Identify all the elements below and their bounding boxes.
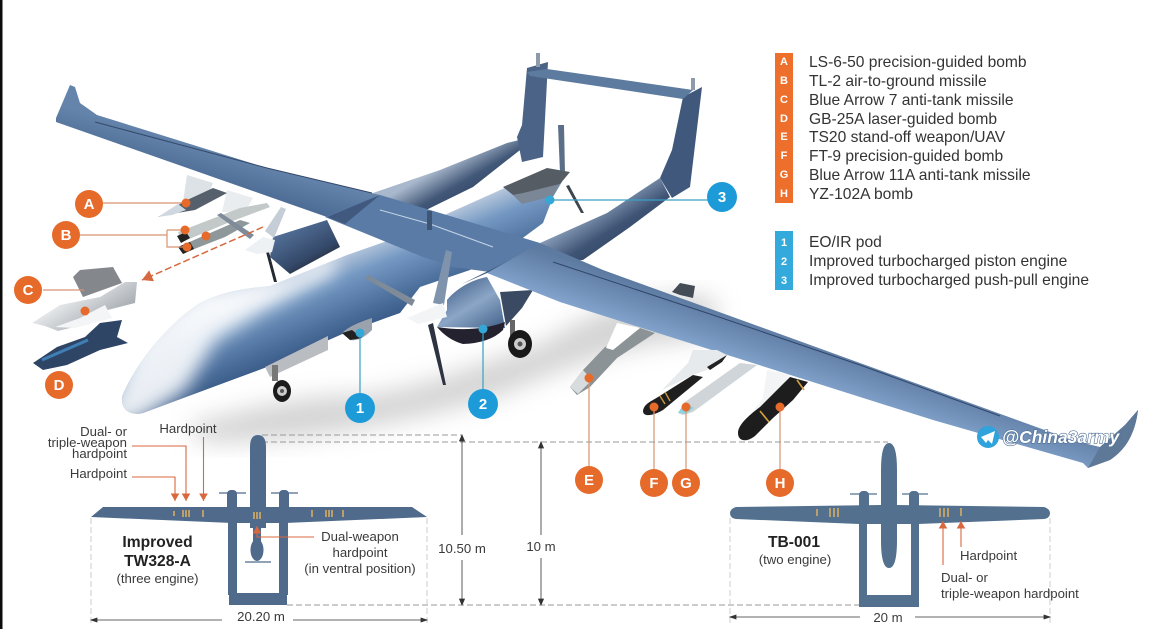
labels: TB-001: Hardpoint (960, 548, 1018, 563)
label E (575, 466, 603, 494)
winglet shade (1088, 410, 1138, 468)
E weapon (570, 323, 655, 395)
rear propeller (558, 125, 584, 213)
label B: B (61, 227, 72, 244)
weapons legend: YZ-102A bomb (809, 186, 913, 203)
label 1: 1 (356, 400, 364, 417)
labels: Improved TW328-A: triple-weapon (48, 435, 127, 450)
near engine nacelle (437, 277, 533, 344)
dimension guide lines (91, 435, 1050, 625)
horizontal tail (527, 69, 693, 99)
labels: TB-001 (759, 534, 1079, 625)
right wing (487, 243, 1138, 468)
labels: Improved TW328-A: Hardpoint (159, 421, 217, 436)
B missiles (178, 203, 270, 242)
A bomb (158, 188, 227, 217)
propellers (219, 493, 298, 562)
labels: Improved TW328-A: Hardpoint (70, 466, 127, 481)
equipment legend: Improved turbocharged push-pull engine (809, 272, 1089, 289)
fin tips (536, 53, 695, 90)
label H: H (775, 475, 785, 492)
label A: A (84, 196, 95, 213)
weapons legend: Blue Arrow 7 anti-tank missile (809, 92, 1014, 109)
plan view: TB-001 (730, 443, 1050, 607)
weapons legend: GB-25A laser-guided bomb (809, 111, 997, 128)
labels: Improved TW328-A: hardpoint (332, 545, 388, 560)
labels: Improved TW328-A: (in ventral position) (304, 561, 416, 576)
label H (766, 469, 794, 497)
H weapon (738, 370, 808, 440)
airframe (91, 435, 427, 605)
weapons legend: TL-2 air-to-ground missile (809, 73, 987, 90)
pylons (183, 175, 213, 202)
main aircraft illustration (32, 53, 1138, 468)
weapons legend: LS-6-50 precision-guided bomb (809, 54, 1027, 71)
watermark: @China3army (1002, 427, 1121, 447)
centre wing (325, 195, 540, 273)
label C: C (23, 282, 34, 299)
weapons legend: Blue Arrow 11A anti-tank missile (809, 167, 1031, 184)
small hardpoint behind wing (672, 283, 695, 298)
label E: E (584, 472, 594, 489)
near tail boom (540, 178, 670, 262)
label B (52, 221, 80, 249)
weapons legend: F (781, 150, 788, 162)
left wing weapons (158, 175, 270, 254)
ground shadow (189, 295, 718, 443)
label 3: 3 (718, 189, 726, 206)
labels: TB-001: (two engine) (759, 552, 831, 567)
left wing (56, 85, 380, 217)
weapons legend (775, 53, 1031, 203)
nose highlight (122, 258, 344, 414)
label F: F (649, 475, 659, 492)
weapon D (33, 320, 128, 370)
label 3 (707, 182, 737, 212)
weapons legend: A (780, 56, 788, 68)
labels: Improved TW328-A: Dual- or (80, 424, 128, 439)
main gear (508, 320, 532, 358)
labels: TB-001: 20 m (873, 610, 903, 625)
labels: Improved TW328-A: TW328-A (124, 553, 191, 570)
engine fairing (450, 245, 540, 290)
labels: TB-001: TB-001 (768, 534, 820, 551)
far tail boom (373, 137, 532, 213)
plan view: Improved TW328-A (91, 435, 427, 605)
equipment legend (775, 231, 1089, 290)
wing panel lines (553, 262, 1000, 416)
fuselage (122, 182, 562, 414)
hardpoint leader arrows (132, 437, 961, 565)
label G: G (680, 475, 692, 492)
label F (640, 469, 668, 497)
labels: Improved TW328-A: (three engine) (116, 571, 199, 586)
labels: Improved TW328-A: hardpoint (72, 446, 127, 461)
labels: Improved TW328-A: Improved (122, 534, 193, 551)
label 1 (345, 393, 375, 423)
screenshot edge (0, 0, 2, 629)
weapons legend: E (780, 131, 788, 143)
label G (672, 469, 700, 497)
EO/IR pod (342, 318, 372, 340)
labels: Improved TW328-A: Dual-weapon (321, 529, 399, 544)
front gear (272, 365, 291, 402)
F weapon (643, 350, 727, 415)
left fin (517, 62, 548, 162)
labels: TB-001: triple-weapon hardpoint (941, 586, 1079, 601)
callouts A-D (14, 190, 210, 399)
left wing root fairing (327, 195, 380, 224)
ventral pod under fuselage (265, 336, 328, 377)
label C (14, 276, 42, 304)
callouts 1-3 (345, 182, 737, 423)
hardpoint marks (174, 510, 343, 519)
equipment legend: Improved turbocharged piston engine (809, 253, 1067, 270)
equipment legend: 2 (781, 256, 787, 268)
label A (75, 190, 103, 218)
equipment legend: EO/IR pod (809, 234, 882, 251)
weapons legend: C (780, 94, 788, 106)
equipment legend: 1 (781, 237, 787, 249)
labels: TB-001: Dual- or (941, 570, 989, 585)
weapons legend: TS20 stand-off weapon/UAV (809, 129, 1006, 146)
weapon C (32, 267, 137, 331)
dashed release arrow (142, 227, 263, 280)
labels: Improved TW328-A: 10.50 m (438, 541, 486, 556)
fin stub on wing (427, 211, 432, 230)
weapons legend: H (780, 188, 788, 200)
dimension lines (91, 435, 1050, 622)
weapons legend: G (780, 169, 788, 181)
left engine (217, 207, 340, 282)
equipment legend: 3 (781, 275, 787, 287)
labels: Improved TW328-A: 10 m (526, 539, 556, 554)
weapons legend: B (780, 75, 788, 87)
right fin (660, 87, 702, 198)
wing highlight (380, 210, 493, 247)
labels: Improved TW328-A: 20.20 m (237, 609, 285, 624)
label D (45, 371, 73, 399)
labels: Improved TW328-A (48, 421, 556, 624)
satcom dome (513, 184, 560, 204)
callouts E-H (575, 374, 794, 497)
label 2: 2 (479, 396, 487, 413)
weapons legend: FT-9 precision-guided bomb (809, 148, 1003, 165)
label 2 (468, 389, 498, 419)
label D: D (54, 377, 65, 394)
weapons legend: D (780, 113, 788, 125)
G weapon (678, 363, 757, 415)
near engine propeller (365, 250, 452, 385)
